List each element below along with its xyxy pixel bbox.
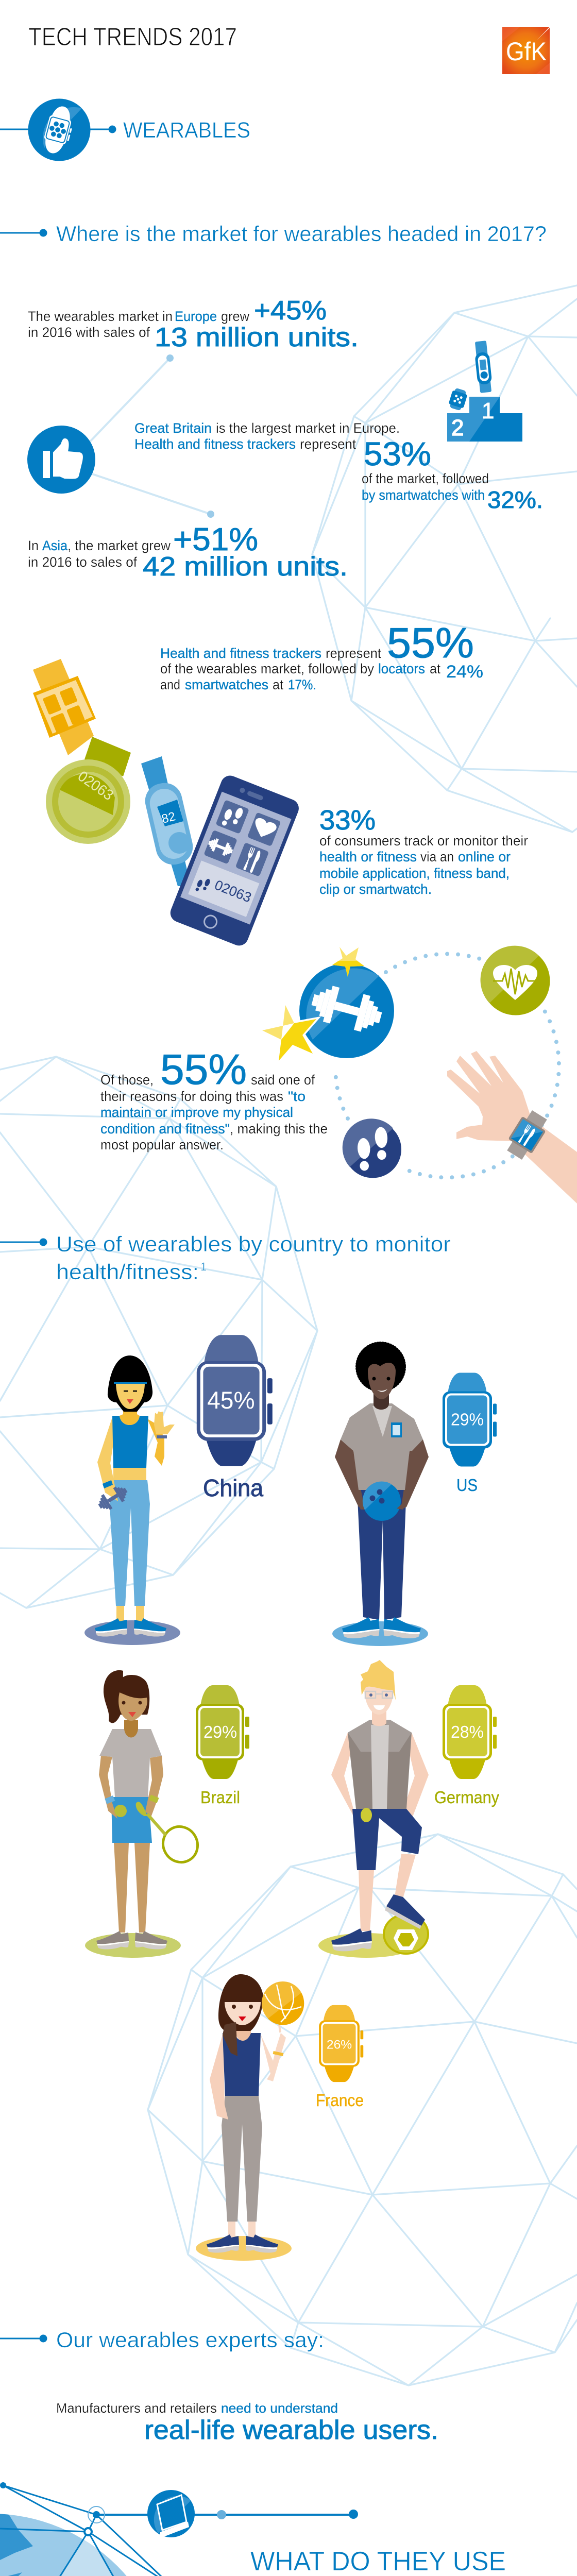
- watch: US 29%: [443, 1372, 497, 1466]
- illustration: connected globe: [0, 2482, 358, 2576]
- heading: what do they use and why: WHAT DO THEY USE: [250, 2547, 506, 2576]
- heading: wearables: WEARABLES: [123, 118, 250, 143]
- watch: China 45%: 45%: [207, 1387, 254, 1414]
- watch: Germany 28%: 28%: [451, 1722, 484, 1741]
- label: Germany: Germany: [434, 1788, 499, 1807]
- text: Asia market: Asia: [42, 538, 68, 553]
- text: trackers share: 24%: [446, 662, 483, 682]
- heading: use of wearables by country: health/fitness:: [56, 1260, 199, 1284]
- label: Brazil: Brazil: [200, 1788, 240, 1807]
- watch: Brazil 29%: [196, 1685, 249, 1779]
- text: manufacturers and retailers: Manufacturers and retailers: [56, 2400, 217, 2416]
- illustration: green clip tracker: 02063: [75, 768, 116, 804]
- text: Asia market: +51%: [173, 522, 258, 557]
- watch: Brazil 29%: 29%: [203, 1722, 237, 1741]
- label: France: France: [316, 2091, 364, 2110]
- text: Asia market: 42 million units.: [143, 552, 348, 582]
- heading: where is the market: Where is the market for wearables headed in 2017?: [56, 222, 547, 246]
- text: 55% said: maintain or improve my physical: [100, 1105, 293, 1120]
- illustration: green clip tracker: [46, 737, 131, 844]
- text: trackers share: at: [430, 661, 440, 676]
- text: 33% of consumers: clip or smartwatch.: [319, 882, 432, 897]
- GfK logo: [502, 27, 550, 74]
- text: Europe market: in 2016 with sales of: [28, 325, 150, 340]
- icon: thumb up with connectors: [27, 354, 214, 518]
- heading: use of wearables by country: 1: [200, 1260, 207, 1273]
- text: 55% said: condition and fitness": [100, 1121, 230, 1137]
- icon: podium with tracker and smartwatch: 1: [482, 398, 494, 423]
- text: Great Britain: is the largest market in Europe.: [216, 420, 400, 436]
- text: Europe market: 13 million units.: [155, 323, 359, 352]
- text: 33% of consumers: 33%: [319, 805, 376, 836]
- character: France woman: [196, 1974, 304, 2261]
- text: 55% said: 55%: [160, 1045, 247, 1093]
- illustration: smartphone: 02063: [212, 877, 253, 906]
- text: 55% said: their reasons for doing this was: [100, 1089, 283, 1104]
- text: Great Britain: by smartwatches with: [362, 487, 485, 503]
- text: trackers share: 17%.: [288, 677, 316, 692]
- heading: use of wearables by country: [0, 1232, 451, 1284]
- text: 55% said: "to: [288, 1089, 306, 1104]
- text: Asia market: , the market grew: [67, 538, 171, 553]
- character: Germany man: [318, 1660, 429, 1958]
- text: manufacturers and retailers: [56, 2400, 438, 2445]
- text: Europe market: Europe: [175, 309, 217, 324]
- text: trackers share: at: [273, 677, 283, 692]
- text: trackers share: and: [160, 677, 180, 692]
- icon: heart circle: [481, 946, 550, 1015]
- illustration: hand with watch: [447, 1051, 577, 1204]
- text: trackers share: 55%: [387, 619, 474, 667]
- text: 33% of consumers: health or fitness: [319, 849, 417, 865]
- text: 33% of consumers: mobile application, fitness band,: [319, 866, 510, 881]
- text: Great Britain: represent: [300, 436, 356, 452]
- watch: Germany 28%: [443, 1685, 497, 1779]
- text: manufacturers and retailers: real-life wearable users.: [144, 2415, 438, 2445]
- text: 33% of consumers: [319, 805, 528, 897]
- text: 55% said: [100, 1045, 328, 1153]
- heading: experts say: Our wearables experts say:: [56, 2328, 324, 2352]
- icon: dumbbell circle with stars: [262, 947, 394, 1061]
- text: trackers share: smartwatches: [185, 677, 268, 692]
- label: US: US: [456, 1476, 478, 1495]
- illustration: blue fitness band: 82: [160, 809, 177, 826]
- text: 33% of consumers: of consumers track or monitor their: [319, 833, 528, 849]
- character: Brazil woman: [85, 1670, 204, 1958]
- text: 55% said: , making this the: [230, 1121, 328, 1137]
- heading: use of wearables by country: Use of wearables by country to monitor: [56, 1232, 451, 1256]
- GfK logo: GfK: [506, 37, 547, 66]
- text: trackers share: of the wearables market, followed by: [160, 661, 374, 676]
- illustration: blue fitness band: [141, 756, 196, 886]
- text: trackers share: Health and fitness trackers: [160, 646, 321, 661]
- watch: US 29%: 29%: [451, 1410, 484, 1429]
- text: 55% said: said one of: [251, 1072, 315, 1088]
- text: 33% of consumers: via an: [420, 849, 454, 865]
- section marker: wearables: [0, 99, 116, 161]
- text: 33% of consumers: online or: [458, 849, 511, 865]
- label: China: China: [203, 1475, 263, 1501]
- text: Asia market: in 2016 to sales of: [28, 554, 137, 570]
- text: trackers share: [160, 619, 483, 692]
- illustration: smartphone: [167, 773, 301, 948]
- text: Asia market: [28, 522, 348, 582]
- text: Great Britain: Health and fitness trackers: [134, 436, 296, 452]
- icon: podium with tracker and smartwatch: [447, 341, 522, 442]
- text: Europe market: grew: [221, 309, 249, 324]
- watch: France 26%: 26%: [327, 2038, 352, 2052]
- text: Asia market: In: [28, 538, 39, 553]
- text: Great Britain: [134, 420, 543, 513]
- text: 55% said: most popular answer.: [100, 1137, 224, 1153]
- watch: China 45%: [197, 1335, 273, 1466]
- text: Great Britain: 53%: [364, 435, 431, 472]
- text: Great Britain: Great Britain: [134, 420, 212, 436]
- text: 55% said: Of those,: [100, 1072, 154, 1088]
- text: manufacturers and retailers: need to understand: [221, 2400, 338, 2416]
- icon: laptop: [147, 2490, 195, 2538]
- character: US man: [332, 1343, 429, 1646]
- header: title: TECH TRENDS 2017: [28, 23, 237, 51]
- text: Great Britain: 32%.: [487, 486, 543, 513]
- text: trackers share: represent: [326, 646, 381, 661]
- text: Europe market: [28, 296, 359, 352]
- text: trackers share: locators: [378, 661, 425, 676]
- icon: footprints circle: [343, 1118, 401, 1178]
- illustration: yellow smartwatch: [33, 659, 96, 755]
- character: China woman: [84, 1355, 180, 1645]
- icon: podium with tracker and smartwatch: 2: [451, 415, 464, 440]
- text: Great Britain: of the market, followed: [362, 471, 489, 486]
- text: Europe market: +45%: [254, 296, 327, 326]
- watch: France 26%: [319, 2005, 363, 2082]
- text: Europe market: The wearables market in: [28, 309, 173, 324]
- dotted ring: [335, 954, 559, 1178]
